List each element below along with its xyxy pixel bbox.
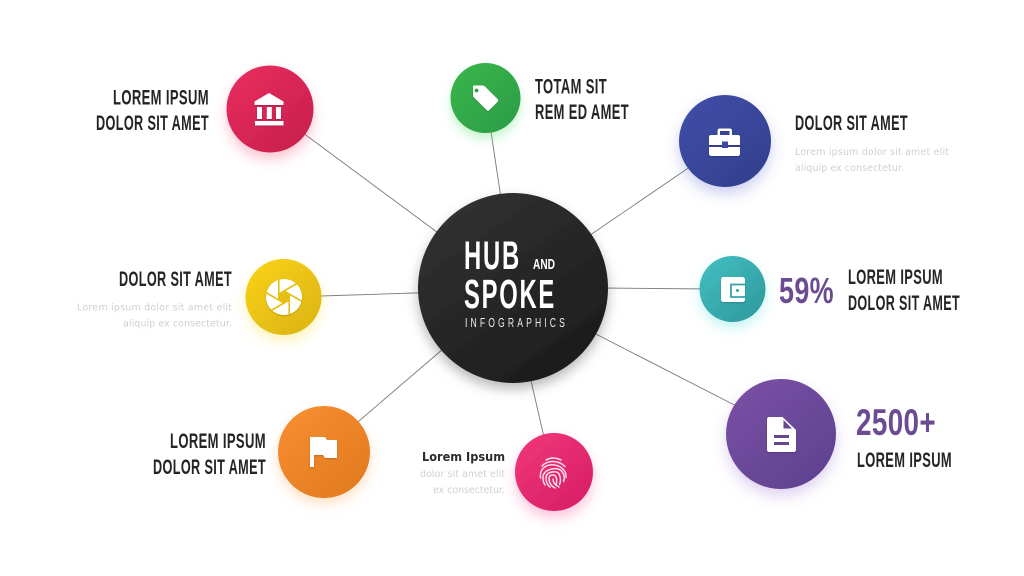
label: teal node text [848,266,960,315]
label: blue node text: aliquip ex consectetur. [795,163,904,174]
label: red node text: DOLOR SIT AMET [96,112,209,135]
hub: central circle [418,193,608,383]
icon: briefcase [709,128,740,156]
label: yellow node text: DOLOR SIT AMET [119,268,232,291]
label: blue node text [795,112,949,174]
node: yellow aperture [246,259,322,335]
title: hub and spoke [464,234,568,330]
label: teal node text: LOREM IPSUM [848,266,943,289]
stat: 2500+: 2500+ [856,402,936,443]
stat: 59%: 59% [779,270,834,311]
label: pink node text: Lorem Ipsum [422,450,505,464]
label: green node text: TOTAM SIT [535,76,607,98]
node: pink fingerprint [515,433,593,511]
icon: aperture [266,279,302,315]
icon: bank [254,93,284,126]
label: pink node text: dolor sit amet elit [420,469,505,480]
label: orange node text: LOREM IPSUM [170,430,266,453]
title: hub and spoke: AND [533,257,555,273]
icon: fingerprint [540,458,566,488]
label: green node text: REM ED AMET [535,101,629,124]
node: blue briefcase [679,95,771,187]
label: yellow node text: aliquip ex consectetur. [123,318,232,330]
label: blue node text: DOLOR SIT AMET [795,112,908,135]
node: green tag [450,63,520,133]
label: orange node text: DOLOR SIT AMET [153,456,266,479]
label: yellow node text: Lorem ipsum dolor sit amet elit [77,302,232,314]
icon: tag [473,86,498,111]
icon: flag [310,437,337,467]
node: teal wallet [700,256,766,322]
label: orange node text [153,430,266,479]
spokes connecting hub to nodes [295,125,750,450]
title: hub and spoke: HUB [464,234,521,278]
label: pink node text [420,450,505,496]
label: yellow node text [77,268,232,330]
title: hub and spoke: SPOKE [464,271,556,317]
label: green node text [535,76,629,124]
label: red node text: LOREM IPSUM [113,86,209,110]
icon: document [767,417,796,452]
icon: wallet [721,277,745,302]
label: red node text [96,86,209,135]
label: pink node text: ex consectetur. [433,485,505,496]
node: orange flag [278,406,370,498]
title: hub and spoke: INFOGRAPHICS [465,316,568,330]
node: red bank [226,66,314,152]
label: purple node text: LOREM IPSUM [857,449,952,472]
node: purple document [726,379,836,489]
label: blue node text: Lorem ipsum dolor sit amet elit [795,147,949,158]
